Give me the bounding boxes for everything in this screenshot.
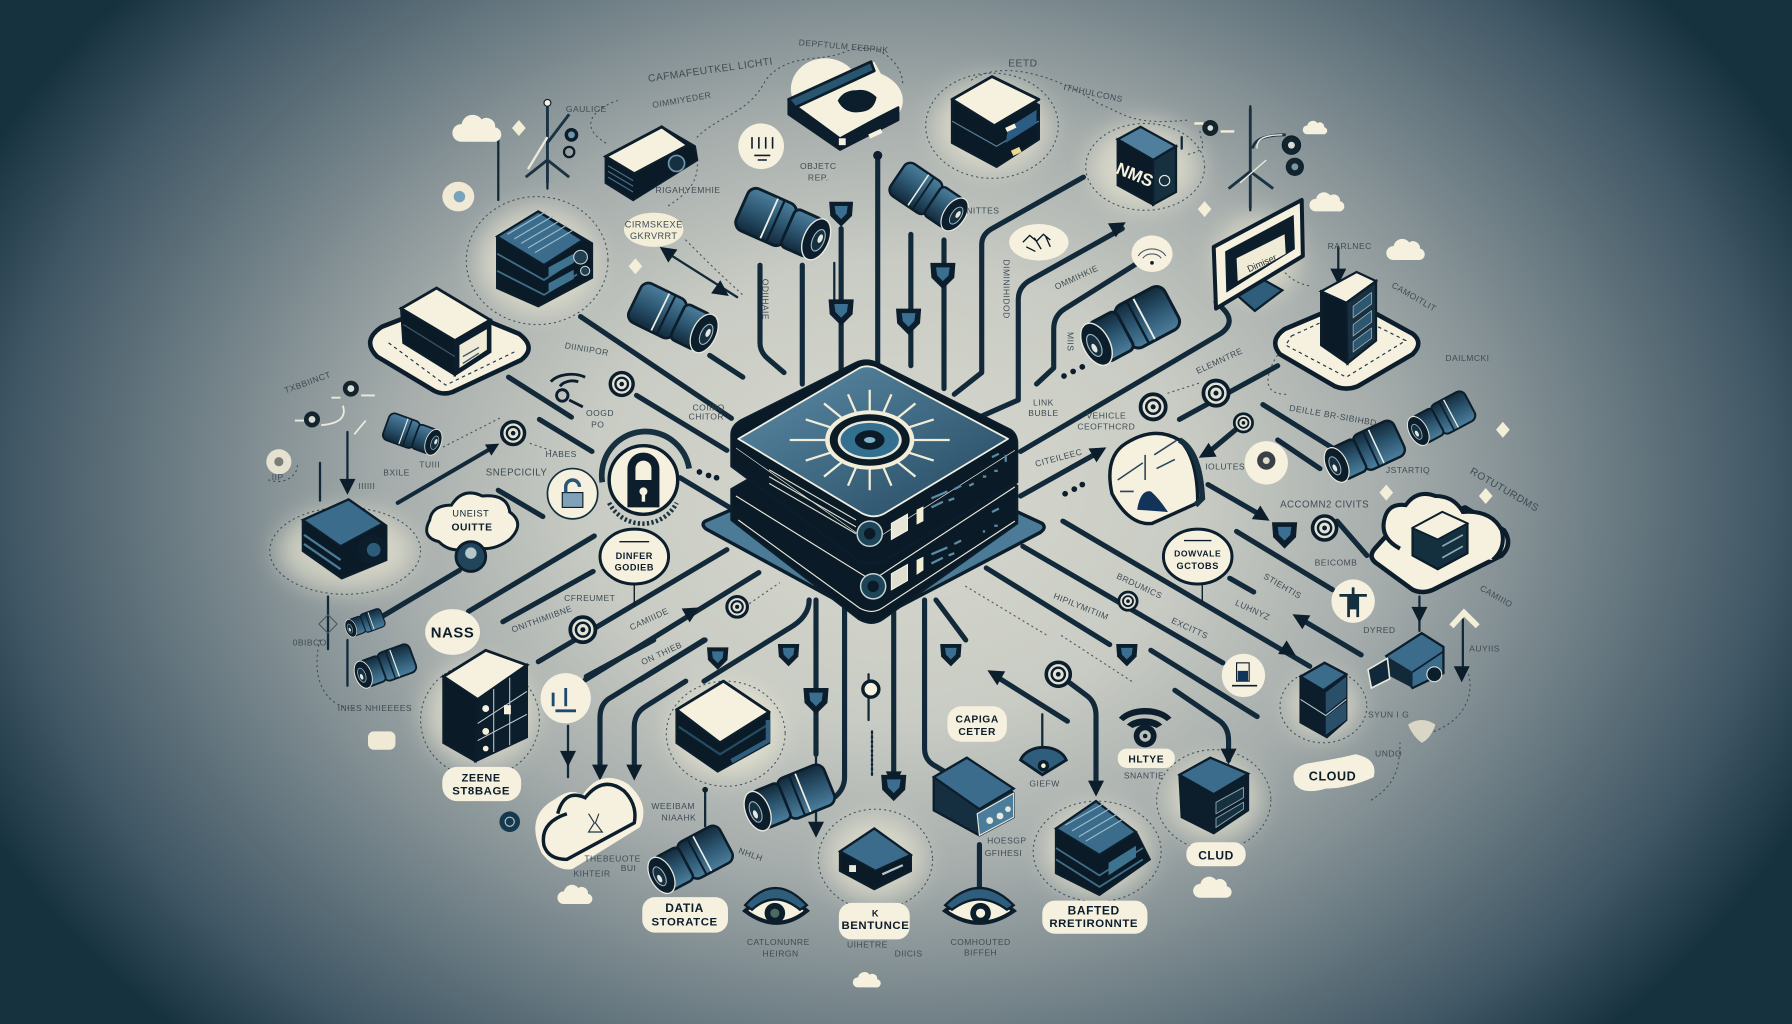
label: BENTUNCE: K — [872, 909, 879, 919]
connector lines: left — [383, 317, 759, 680]
small annotation labels — [272, 37, 1540, 959]
lower layer — [731, 411, 1017, 623]
small annotation labels: GFIHESI — [985, 848, 1022, 858]
wifi icon bottom — [1119, 708, 1171, 747]
connector lines: right — [986, 366, 1367, 790]
small annotation labels: IOLUTES — [1205, 462, 1245, 472]
small annotation labels: CHITOR — [689, 411, 724, 421]
NMS server: NMS — [1114, 158, 1156, 191]
small annotation labels: HIPILYMITIIM — [1052, 591, 1110, 622]
blue device bottom — [934, 758, 1014, 835]
dome camera — [1021, 747, 1066, 775]
small annotation labels: NHLH — [737, 845, 764, 863]
monitor: Dimiser — [1246, 252, 1278, 274]
small annotation labels: SNANTIE — [1124, 770, 1164, 780]
label: CAMERA SERVER pill: GKRVRRT — [630, 231, 677, 241]
label: BAFTED REDUNDANCY: RRETIRONNTE — [1049, 918, 1138, 930]
small annotation labels: DIINIIPOR — [564, 340, 610, 358]
small annotation labels: CAMOITLIT — [1390, 280, 1438, 314]
small annotation labels: TUIII — [419, 459, 440, 469]
central base plate — [703, 480, 1044, 616]
bubble: DINFER: GODIEB — [615, 562, 654, 572]
small annotation labels: OOGD — [586, 408, 614, 418]
label: ZEENE STORAGE: ZEENE — [462, 773, 501, 785]
server box bottom left — [677, 681, 769, 771]
thin arrows and stems — [319, 103, 1478, 838]
small annotation labels: EXCITTS — [1170, 615, 1210, 641]
small annotation labels: UIHETRE — [847, 939, 888, 949]
small annotation labels: MIIS — [1065, 332, 1075, 351]
NASS bubble: NASS — [431, 626, 474, 642]
small annotation labels: CEOFTHCRD — [1077, 422, 1135, 432]
floating clouds and decorations — [368, 115, 1510, 987]
small annotation labels: ONITHIMIIBNE — [510, 603, 574, 635]
small annotation labels: DEPFTULM EEBPHK — [798, 37, 889, 55]
small annotation labels: INIES NHIEEEES — [338, 703, 412, 713]
label: CAPIGA CENTER: CAPIGA — [955, 714, 999, 725]
pole right with cameras — [1194, 109, 1304, 208]
small annotation labels: OIMMIYEDER — [651, 90, 712, 110]
small annotation labels: DIICIS — [895, 949, 923, 959]
small annotation labels: STIEHTIS — [1262, 571, 1303, 601]
rack server bottom — [1056, 801, 1150, 895]
small annotation labels: UNDO — [1375, 749, 1402, 759]
small annotation labels: SYUN I G — [1368, 710, 1409, 720]
small annotation labels: TXBBIINCT — [283, 369, 332, 395]
small annotation labels: BRDUMICS — [1115, 571, 1164, 601]
label: DATA STORAGE — [642, 897, 728, 933]
ring and shield markers — [502, 202, 1337, 801]
stacked cubes right — [1301, 663, 1346, 737]
small annotation labels: DAILMCKI — [1445, 353, 1489, 363]
label: BENTUNCE: BENTUNCE — [841, 920, 909, 932]
small annotation labels: 0BIBCO — [293, 638, 327, 648]
cloud bottom left — [538, 781, 641, 867]
label: ZEENE STORAGE: ST8BAGE — [452, 785, 510, 797]
left platform with server — [370, 288, 529, 393]
NMS server — [1114, 127, 1176, 205]
box bottom right — [1179, 758, 1248, 833]
NASS bubble — [425, 609, 480, 655]
bubble: DINFER: DINFER — [616, 551, 653, 561]
bubble: cloud camera — [427, 493, 518, 571]
small annotation labels: NITTES — [966, 206, 999, 216]
label: DATA STORAGE: DATIA — [665, 901, 704, 915]
server stack top centre — [952, 77, 1039, 167]
NAS cabinet — [443, 650, 527, 761]
small annotation labels: KIHTEIR — [574, 869, 610, 879]
label: HLTYE: HLTYE — [1128, 754, 1164, 765]
label: DATA STORAGE: STORATCE — [651, 917, 718, 929]
small annotation labels: JSTARTIQ — [1386, 465, 1430, 475]
small annotation labels: BXILE — [383, 467, 410, 477]
small annotation labels: HEIRGN — [763, 949, 799, 959]
small annotation labels: WEEIBAM — [651, 801, 695, 811]
circular icons — [541, 123, 1375, 723]
small annotation labels: ON THIEB — [640, 639, 684, 667]
small annotation labels: SNEPCICILY — [486, 467, 547, 478]
small annotation labels: GAULICE — [566, 104, 607, 114]
small annotation labels: GIEFW — [1029, 778, 1060, 788]
small annotation labels: ITHHULCONS — [1063, 82, 1124, 104]
connector lines: bottom — [586, 600, 979, 887]
small annotation labels: PO — [591, 419, 604, 429]
bubble: cloud camera: UNEIST — [452, 509, 489, 519]
bubble: DOWVALE: GCTOBS — [1177, 561, 1219, 571]
box camera left — [303, 499, 387, 578]
upper layer — [731, 361, 1017, 563]
small annotation labels: VEHICLE — [1086, 410, 1126, 420]
rack server upper left — [497, 211, 592, 306]
gauge shield — [1110, 433, 1202, 524]
dotted orbit lines — [269, 48, 1470, 910]
label: CAPIGA CENTER: CETER — [958, 727, 996, 738]
monitor — [1214, 200, 1303, 311]
bubble: cloud camera: OUITTE — [451, 522, 493, 533]
small annotation labels: EETD — [1008, 58, 1037, 69]
right platform with server tower — [1275, 272, 1418, 389]
eyes — [745, 888, 1014, 923]
small annotation labels: HOESGP — [987, 835, 1027, 845]
small annotation labels: LINK — [1033, 398, 1054, 408]
small annotation labels: NIAAHK — [662, 813, 696, 823]
small annotation labels: COMHOUTED — [950, 937, 1011, 947]
cloud platform right — [1372, 494, 1508, 592]
small annotation labels: RIGAHYEMHIE — [656, 185, 720, 195]
small annotation labels: BUI — [621, 863, 636, 873]
box camera right — [1368, 633, 1443, 688]
small annotation labels: REP. — [808, 173, 829, 183]
small annotation labels: AUYIIS — [1469, 643, 1500, 653]
small lock circle — [547, 469, 598, 519]
small annotation labels: CFREUMET — [564, 593, 616, 603]
small annotation labels: IIIIII — [358, 481, 375, 491]
label: CAPIGA CENTER — [947, 706, 1007, 742]
connector lines: top — [760, 154, 1229, 451]
label: BAFTED REDUNDANCY: BAFTED — [1068, 903, 1120, 917]
label: CLOUD — [1293, 754, 1374, 791]
central recorder device — [731, 361, 1017, 623]
bubble: DOWVALE — [1163, 529, 1232, 601]
small annotation labels: ACCOMN2 CIVITS — [1280, 499, 1369, 510]
pole left with cameras — [526, 99, 578, 183]
cream glows — [277, 80, 1358, 901]
small annotation labels: LUHNYZ — [1234, 598, 1272, 622]
label: CLOUD: CLOUD — [1309, 770, 1356, 784]
small annotation labels: BUBLE — [1028, 408, 1059, 418]
label: CLUD: CLUD — [1198, 848, 1234, 862]
bubble: DINFER — [600, 529, 669, 606]
small annotation labels: COIIIIO — [692, 402, 725, 412]
small annotation labels: OMMIHKIE — [1053, 263, 1100, 292]
small annotation labels: OBJETC — [800, 161, 837, 171]
small annotation labels: CAFMAFEUTKEL LICHTI — [647, 56, 774, 85]
small annotation labels: DEILLE BR-SIBIHBD — [1289, 403, 1378, 428]
small annotation labels: RARLNEC — [1328, 241, 1372, 251]
small annotation labels: THEBEUOTE — [584, 854, 641, 864]
small annotation labels: HABES — [545, 449, 577, 459]
wifi icon left — [551, 374, 585, 407]
small annotation labels: BEICOMB — [1315, 558, 1357, 568]
small annotation labels: DIMINIHIDOD — [1001, 260, 1011, 319]
projector box — [606, 127, 697, 200]
small annotation labels: BIFFEH — [964, 947, 997, 957]
small annotation labels: CAMIIIO — [1478, 583, 1514, 610]
small annotation labels: ELEMNTRE — [1194, 346, 1244, 376]
top device with cream blob — [789, 58, 903, 160]
eye emblem — [790, 390, 950, 490]
cameras — [343, 160, 1478, 899]
small annotation labels: CITEILEEC — [1034, 447, 1083, 469]
small annotation labels: ODIIHAIE — [760, 279, 770, 320]
label: BENTUNCE — [839, 903, 910, 939]
blue box centre bottom — [840, 829, 911, 889]
bubble: DOWVALE: DOWVALE — [1174, 549, 1221, 559]
label: CLUD — [1186, 842, 1246, 866]
padlock badge — [602, 431, 689, 524]
label: HLTYE — [1118, 749, 1175, 768]
small annotation labels: IIP — [272, 472, 284, 482]
camera cluster far left — [266, 381, 375, 474]
small annotation labels: CAMIIIDE — [628, 606, 670, 632]
label: ZEENE STORAGE — [442, 767, 521, 801]
label: CAMERA SERVER pill — [624, 213, 683, 247]
small annotation labels: CATLONUNRE — [747, 937, 810, 947]
dotted link points — [697, 364, 1085, 497]
small annotation labels: DYRED — [1363, 625, 1396, 635]
small annotation labels: ROTUTURDMS — [1468, 466, 1540, 515]
label: CAMERA SERVER pill: CIRMSKEXE — [625, 219, 683, 229]
label: BAFTED REDUNDANCY — [1042, 901, 1147, 934]
